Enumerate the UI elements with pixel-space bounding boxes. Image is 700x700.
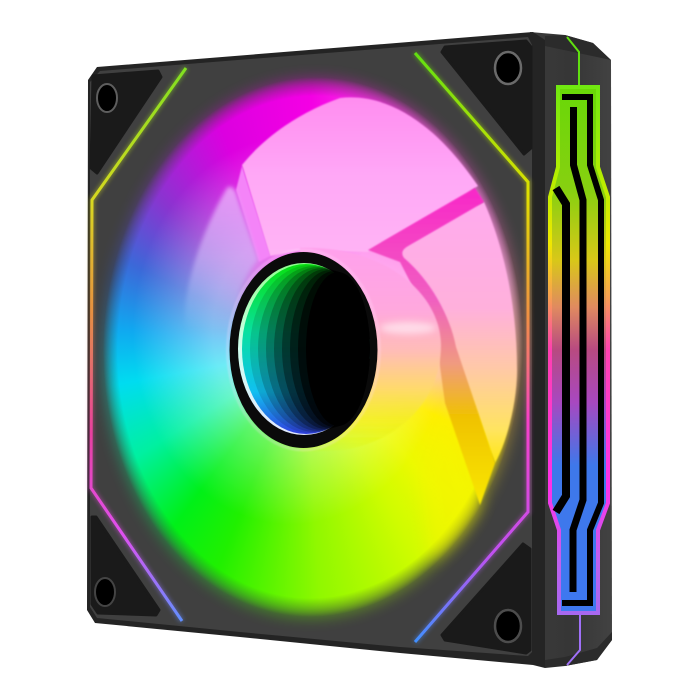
screw hole: bottom right [495, 610, 521, 642]
pad: bottom right [442, 544, 530, 653]
screw hole: top right [495, 52, 521, 84]
side light channel [550, 37, 608, 665]
blade: left [185, 187, 258, 330]
screw hole: top left [97, 84, 117, 112]
side panel [530, 32, 612, 668]
pad: top left [91, 71, 161, 173]
front face rim [87, 32, 545, 668]
infinity mirror [238, 263, 370, 435]
pad: top right [442, 41, 531, 154]
hub highlight [380, 322, 436, 334]
hub outer glow [228, 250, 380, 450]
fan illustration [86, 32, 612, 668]
LED line: left [91, 68, 186, 621]
blade: top [242, 97, 478, 256]
hub body [300, 248, 441, 452]
pad: bottom left [92, 517, 159, 615]
magenta blade edge [368, 188, 495, 505]
LED line: right [415, 53, 528, 642]
blade: right [402, 202, 517, 463]
fan wheel [96, 72, 530, 622]
screw hole: bottom left [95, 578, 115, 606]
blade: lower right [420, 403, 480, 560]
hub ring [230, 252, 378, 448]
wheel glow [96, 73, 530, 623]
blade: upper-left slit [236, 166, 270, 262]
front face [90, 37, 532, 656]
